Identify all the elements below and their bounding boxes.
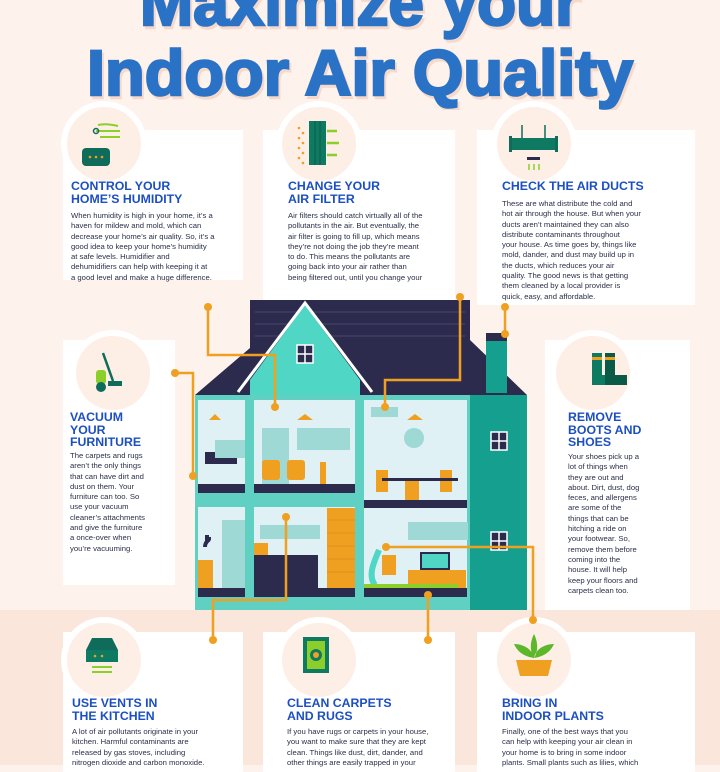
text: ducts: These are what distribute the cold and (502, 199, 632, 208)
heading: carpets: AND RUGS (287, 708, 353, 722)
icon: boots (592, 353, 627, 385)
icon: vacuum (96, 353, 122, 392)
heading: filter: CHANGE YOUR (288, 179, 380, 193)
text: carpets: If you have rugs or carpets in your house, (287, 727, 428, 736)
text: filter: they’re not doing the job they’re meant (288, 242, 419, 251)
panel: plants (477, 632, 695, 772)
text: vacuum: that can have dirt and (70, 472, 144, 481)
text: filter: air filter is going to fill up, which means (288, 232, 420, 241)
text: carpets: other things are easily trapped in your (287, 758, 416, 767)
heading: vacuum: YOUR (70, 422, 106, 436)
text: ducts: quality. The good news is that getting (502, 271, 628, 280)
panel: air filter (263, 130, 455, 300)
text: ducts: mold, dander, and dust may build up in (502, 250, 634, 259)
text: boots: Your shoes pick up a (568, 452, 639, 461)
heading: carpets: CLEAN CARPETS (287, 696, 392, 710)
heading: vents: THE KITCHEN (72, 708, 155, 722)
text: filter: going back into your air rather than (288, 262, 407, 271)
heading: vents (72, 696, 157, 722)
heading: filter (288, 179, 380, 206)
text: plants: plants. Small plants such as lilies, which (502, 758, 638, 767)
text: boots: things that can be (568, 514, 629, 523)
text: vacuum: and give the furniture (70, 523, 142, 532)
text: boots: they are out and (568, 473, 624, 482)
arrows: connector lines (171, 293, 537, 644)
panel: boots (545, 340, 690, 610)
text: plants (502, 727, 638, 767)
text: humidity (71, 211, 215, 282)
panel: carpets (263, 632, 455, 772)
text: boots: about. Dirt, dust, dog (568, 483, 639, 492)
text: boots: carpets clean too. (568, 586, 629, 595)
text: filter (288, 211, 423, 282)
house illustration (195, 300, 527, 610)
heading: boots: SHOES (568, 435, 611, 449)
icon: air duct (509, 125, 558, 170)
text: humidity: at safe levels. Humidifier and (71, 252, 170, 261)
text: humidity: good idea to keep your home’s humidity (71, 242, 207, 251)
heading: humidity: HOME’S HUMIDITY (71, 192, 182, 206)
text: vacuum: The carpets and rugs (70, 451, 143, 460)
panel: vacuum (63, 340, 175, 585)
text: ducts: the ducts, which reduces your air (502, 261, 614, 270)
text: vents: released by gas stoves, including (72, 748, 185, 757)
icon: rug (303, 637, 329, 673)
heading: humidity (71, 179, 182, 206)
text: ducts (502, 199, 641, 301)
heading: plants (502, 696, 604, 722)
text: humidity: decrease your home’s air quality. So, it’s a (71, 232, 215, 241)
icon: range hood (86, 638, 118, 672)
text: vacuum: aren’t the only things (70, 461, 141, 470)
heading: vacuum (70, 410, 141, 449)
text: vents: A lot of air pollutants originate in your (72, 727, 198, 736)
heading: boots: REMOVE (568, 410, 621, 424)
text: vacuum: use your vacuum (70, 502, 129, 511)
heading: plants: INDOOR PLANTS (502, 708, 604, 722)
text: boots: keep your floors and (568, 576, 638, 585)
panel: air ducts (477, 130, 695, 305)
panel: humidity (63, 130, 243, 280)
text: humidity: a good level and make a huge difference. (71, 273, 212, 282)
heading: vents: USE VENTS IN (72, 696, 157, 710)
heading: boots: BOOTS AND (568, 422, 641, 436)
text: vacuum: furniture can too. So (70, 492, 139, 501)
text: boots (568, 452, 640, 595)
text: ducts: distribute contaminants throughout (502, 230, 620, 239)
text: vacuum: a once-over when (70, 533, 131, 542)
text: ducts: hot air through the house. But when your (502, 209, 641, 218)
title: Indoor Air Quality (87, 37, 633, 109)
icon: plant (514, 634, 554, 676)
text: vacuum (70, 451, 145, 553)
text: boots: coming into the (568, 555, 620, 564)
text: vacuum: you’re vacuuming. (70, 544, 132, 553)
icon: air filter (298, 121, 339, 165)
text: ducts: quick, easy, and affordable. (502, 292, 595, 301)
heading: boots (568, 410, 641, 449)
text: vacuum: cleaner’s attachments (70, 513, 145, 522)
text: boots: your footwear. So, (568, 534, 630, 543)
text: plants: Finally, one of the best ways that you (502, 727, 628, 736)
title: Indoor Air Quality (89, 40, 635, 110)
text: filter: Air filters should catch virtually all of the (288, 211, 423, 220)
text: filter: to do. This means the pollutants are (288, 252, 410, 261)
text: boots: lot of things when (568, 462, 628, 471)
text: filter: being filtered out, until you change your (288, 273, 422, 282)
text: humidity: When humidity is high in your home, it’s a (71, 211, 213, 220)
text: humidity: haven for mildew and mold, which can (71, 221, 201, 230)
heading: ducts: CHECK THE AIR DUCTS (502, 179, 644, 193)
text: filter: pollutants in the air. But eventually, the (288, 221, 419, 230)
text: carpets (287, 727, 428, 767)
heading: plants: BRING IN (502, 696, 557, 710)
icon: humidifier (82, 124, 120, 166)
panel: vents (63, 632, 243, 772)
heading: humidity: CONTROL YOUR (71, 179, 170, 193)
text: vents: kitchen. Harmful contaminants are (72, 737, 189, 746)
heading: filter: AIR FILTER (288, 192, 355, 206)
text: boots: hitching a ride on (568, 524, 627, 533)
text: humidity: dehumidifiers can help with keeping it at (71, 262, 207, 271)
text: vacuum: dust on them. Your (70, 482, 134, 491)
heading: vacuum: FURNITURE (70, 435, 141, 449)
text: ducts: ducts aren’t maintained they can also (502, 220, 629, 229)
text: carpets: you want to make sure that they are kept (287, 737, 426, 746)
text: boots: are some of the (568, 503, 621, 512)
text: carpets: clean. Things like dust, dirt, dander, and (287, 748, 423, 757)
text: boots: remove them before (568, 545, 637, 554)
text: plants: can help with keeping your air clean in (502, 737, 632, 746)
title (87, 0, 636, 110)
text: boots: house. It will help (568, 565, 627, 574)
heading: carpets (287, 696, 392, 722)
text: boots: feces, and allergens (568, 493, 637, 502)
heading: vacuum: VACUUM (70, 410, 123, 424)
text: ducts: your house. As time goes by, things like (502, 240, 636, 249)
text: vents: nitrogen dioxide and carbon monoxide. (72, 758, 204, 767)
text: vents (72, 727, 204, 767)
text: ducts: them cleaned by a local provider is (502, 281, 620, 290)
text: plants: your home is to bring in some indoor (502, 748, 626, 757)
